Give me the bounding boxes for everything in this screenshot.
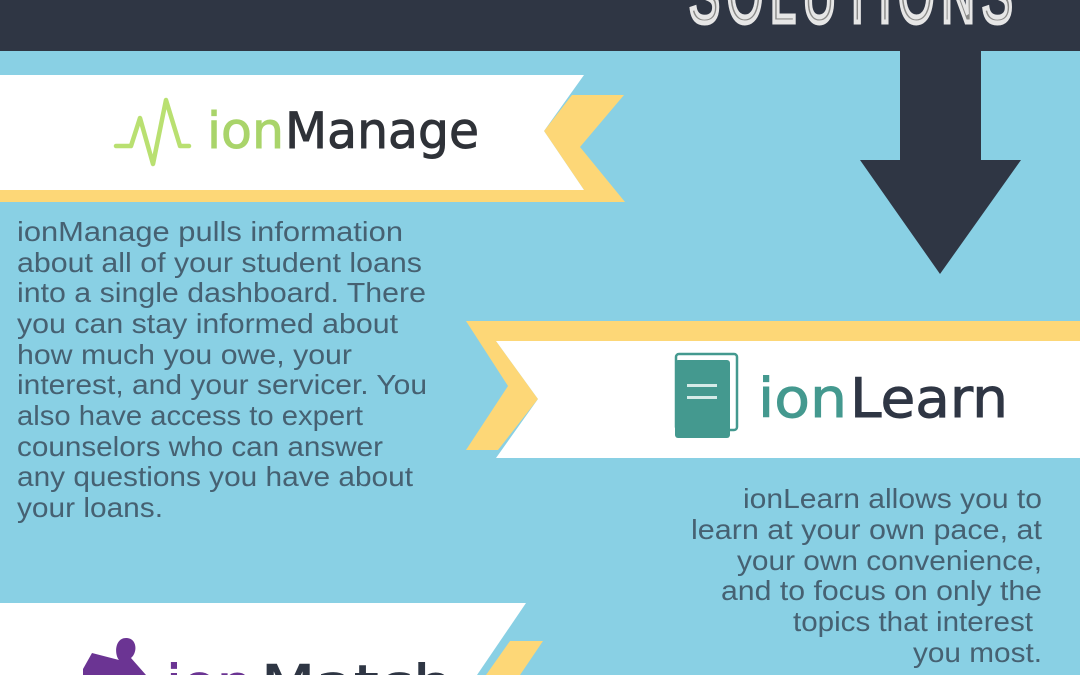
header band [0, 0, 1080, 51]
text block: ionManage description: how much you owe, your [17, 339, 352, 370]
ribbon: ionLearn [466, 321, 1080, 458]
ribbon: ionMatch [0, 603, 543, 675]
text block: ionManage description: your loans. [17, 492, 163, 523]
icon: pulse line [116, 100, 189, 164]
text block: ionLearn description: and to focus on only the [721, 575, 1042, 606]
logo text: ionMatch [166, 655, 453, 675]
icon: book [675, 354, 737, 438]
text block: ionManage description: you can stay informed about [17, 308, 398, 339]
text block: ionManage description: about all of your student loans [17, 247, 422, 278]
text block: ionManage description: also have access to expert [17, 400, 363, 431]
text block: ionLearn description: you most. [913, 637, 1042, 668]
arrow pointing down [860, 51, 1021, 274]
text block: ionLearn description: ionLearn allows you to [743, 483, 1042, 514]
logo text: ionLearn: ion [758, 367, 847, 430]
text block: ionLearn description: topics that interest [793, 606, 1033, 637]
icon: puzzle piece [83, 638, 146, 675]
text block: ionLearn description: your own convenience, [737, 545, 1042, 576]
text block: ionManage description: any questions you have about [17, 461, 413, 492]
logo text: ionManage: Manage [285, 102, 479, 160]
text block: ionLearn description [691, 483, 1042, 668]
text block: ionManage description: ionManage pulls information [17, 216, 403, 247]
text block: ionManage description [17, 216, 427, 523]
logo text: ionLearn [758, 367, 1008, 430]
text block: ionManage description: counselors who can answer [17, 431, 383, 462]
text block: ionManage description: into a single dashboard. There [17, 277, 426, 308]
logo text: ionLearn: Learn [850, 367, 1008, 430]
text block: ionManage description: interest, and your servicer. You [17, 369, 427, 400]
text block: ionLearn description: learn at your own pace, at [691, 514, 1042, 545]
logo text: ionManage: ion [207, 102, 284, 160]
ribbon: ionManage [0, 75, 625, 202]
